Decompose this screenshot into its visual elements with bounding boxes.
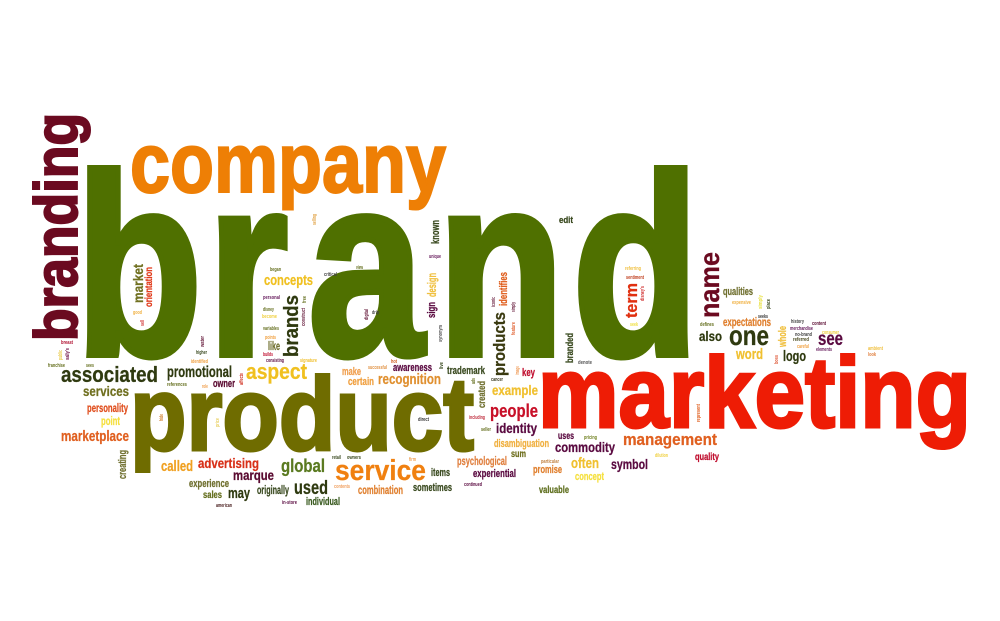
tiny words: began: [270, 267, 281, 273]
word: advertising: advertising: [198, 455, 259, 471]
word: quality: quality: [695, 452, 719, 463]
tiny words: [48, 214, 883, 509]
word: example: example: [492, 382, 538, 398]
word: certain: certain: [348, 376, 374, 388]
tiny words: disney's: [640, 286, 646, 301]
tiny words: identified: [191, 359, 208, 365]
word: called: called: [161, 458, 193, 475]
word: items: items: [431, 467, 450, 479]
tiny words: represent: [696, 404, 702, 422]
word: name: name: [694, 252, 725, 318]
tiny words: look: [868, 352, 877, 358]
tiny words: ambient: [868, 346, 883, 352]
medium words: left cluster: [61, 264, 313, 502]
word: term: term: [622, 283, 641, 318]
tiny words: merchandise: [790, 326, 813, 332]
tiny words: price: [215, 418, 221, 427]
tiny words: in-store: [282, 500, 297, 506]
tiny words: retail: [332, 455, 341, 461]
word: often: often: [571, 455, 599, 472]
tiny words: referred: [793, 337, 809, 343]
word: associated: associated: [61, 362, 158, 387]
word: originally: originally: [257, 483, 289, 497]
word: management: management: [623, 430, 717, 449]
tiny words: denote: [578, 360, 592, 366]
tiny words: construct: [301, 308, 307, 326]
word: design: design: [425, 273, 439, 297]
tiny words: references: [167, 382, 187, 388]
word: marque: marque: [233, 467, 274, 483]
tiny words: seek: [630, 322, 639, 328]
tiny words: franchise: [48, 363, 65, 369]
word: trademark: trademark: [447, 365, 486, 377]
tiny words: view: [356, 265, 363, 271]
word: word: word: [735, 346, 763, 363]
word: identifies: identifies: [498, 272, 510, 306]
tiny words: contents: [334, 484, 350, 490]
word: qualities: qualities: [723, 286, 753, 298]
tiny words: careful: [797, 344, 809, 350]
tiny words: owners: [347, 455, 361, 461]
word: disambiguation: disambiguation: [494, 438, 549, 450]
word: experience: experience: [189, 478, 229, 490]
medium words: right cluster: [533, 252, 843, 496]
word: like: like: [268, 339, 280, 353]
tiny words: selling: [312, 214, 318, 225]
tiny words: particular: [541, 459, 560, 465]
word: global: global: [281, 456, 325, 476]
word: promotional: promotional: [167, 364, 232, 381]
tiny words: firm: [409, 457, 416, 463]
tiny words: consumer: [822, 330, 840, 336]
tiny words: digital: [364, 309, 370, 320]
word: sign: sign: [426, 302, 438, 318]
word: sum: sum: [511, 449, 526, 460]
tiny words: cancer: [491, 377, 504, 383]
heading word: company: company: [130, 116, 446, 210]
tiny words: including: [469, 415, 485, 421]
word: promise: promise: [533, 464, 562, 476]
word: point: point: [101, 414, 120, 428]
tiny words: critical: [324, 272, 337, 278]
tiny words: seeks: [758, 314, 768, 320]
word: psychological: psychological: [457, 454, 507, 468]
word: logo: logo: [783, 348, 806, 365]
word: recognition: recognition: [378, 371, 441, 388]
word: people: people: [490, 401, 538, 421]
tiny words: free: [302, 296, 308, 303]
tiny words: water: [200, 335, 206, 348]
tiny words: simply: [511, 301, 517, 312]
tiny words: points: [265, 335, 276, 341]
word: identity: identity: [496, 420, 537, 436]
tiny words: defines: [700, 322, 714, 328]
tiny words: history: [791, 319, 805, 325]
word: service: service: [335, 455, 426, 487]
tiny words: public: [58, 350, 64, 360]
word: valuable: valuable: [539, 485, 569, 496]
heading word: branding: branding: [23, 113, 90, 341]
word: edit: edit: [559, 215, 573, 225]
heading word: brand: brand: [75, 121, 700, 410]
word: may: may: [228, 485, 250, 502]
tiny words: synonym: [438, 325, 444, 342]
word: services: services: [83, 383, 129, 399]
word: concept: concept: [575, 471, 604, 483]
medium words: centre cluster: [281, 215, 573, 508]
tiny words: boss: [774, 355, 780, 364]
tiny words: iconic: [491, 297, 497, 307]
tiny words: seller: [481, 427, 492, 433]
tiny words: consisting: [266, 358, 284, 364]
word: marketplace: marketplace: [61, 428, 129, 445]
tiny words: personal: [263, 295, 280, 301]
tiny words: sentiment: [626, 275, 644, 281]
word: sales: sales: [203, 490, 222, 501]
word: concepts: concepts: [264, 272, 313, 289]
word: used: used: [294, 478, 328, 499]
tiny words: simply: [758, 294, 764, 309]
tiny words: sell: [140, 320, 146, 326]
tiny words: feature: [511, 322, 517, 335]
tiny words: signature: [300, 358, 317, 364]
tiny words: good: [133, 310, 142, 316]
tiny words: breast: [61, 340, 73, 346]
word: see: see: [818, 329, 843, 350]
word: personality: personality: [87, 401, 128, 415]
tiny words: variables: [263, 326, 279, 332]
word: products: products: [490, 312, 509, 376]
tiny words: affects: [239, 373, 245, 385]
word: market: market: [130, 264, 146, 303]
word: aspect: aspect: [246, 359, 308, 384]
word: also: also: [699, 328, 722, 344]
heading word: product: product: [130, 357, 474, 473]
tiny words: unique: [429, 254, 441, 260]
tiny words: drip: [372, 310, 379, 316]
word: symbol: symbol: [611, 456, 648, 472]
tiny words: sees: [86, 363, 94, 369]
tiny words: elements: [816, 347, 832, 353]
tiny words: sally's: [65, 348, 71, 360]
word: brands: brands: [281, 295, 303, 357]
tiny words: successful: [368, 365, 387, 371]
tiny words: direct: [418, 417, 429, 423]
tiny words: american: [216, 503, 232, 509]
tiny words: hot: [391, 359, 397, 365]
word: commodity: commodity: [555, 439, 615, 455]
tiny words: higher: [196, 350, 208, 356]
tiny words: pricing: [584, 435, 597, 441]
tiny words: ads: [471, 378, 477, 384]
word: sometimes: sometimes: [413, 482, 452, 494]
tiny words: image: [515, 366, 521, 375]
word: individual: individual: [306, 496, 340, 508]
word: make: make: [342, 366, 361, 378]
word: branded: branded: [565, 333, 576, 363]
tiny words: role: [202, 384, 208, 390]
word: key: key: [522, 367, 536, 379]
tiny words: become: [262, 314, 277, 320]
tiny words: referring: [625, 266, 641, 272]
word: whole: whole: [777, 326, 789, 348]
tiny words: hide: [159, 414, 165, 421]
word: uses: uses: [558, 431, 574, 442]
word: combination: combination: [358, 483, 403, 497]
word: orientation: orientation: [144, 267, 155, 307]
word: one: one: [729, 320, 769, 351]
tiny words: dilution: [655, 453, 668, 459]
tiny words: continued: [464, 482, 482, 488]
word: known: known: [430, 220, 442, 244]
word: awareness: awareness: [393, 362, 432, 374]
word: expectations: expectations: [723, 315, 771, 329]
tiny words: builds: [263, 352, 273, 358]
word: creating: creating: [117, 450, 129, 479]
tiny words: content: [812, 321, 826, 327]
word: owner: owner: [213, 378, 235, 390]
tiny words: no-brand: [795, 332, 812, 338]
word: experiential: experiential: [473, 468, 516, 480]
word: created: created: [477, 381, 488, 408]
tiny words: live: [439, 362, 445, 369]
tiny words: place: [766, 299, 772, 309]
tiny words: disney: [263, 307, 275, 313]
tiny words: expensive: [732, 300, 751, 306]
